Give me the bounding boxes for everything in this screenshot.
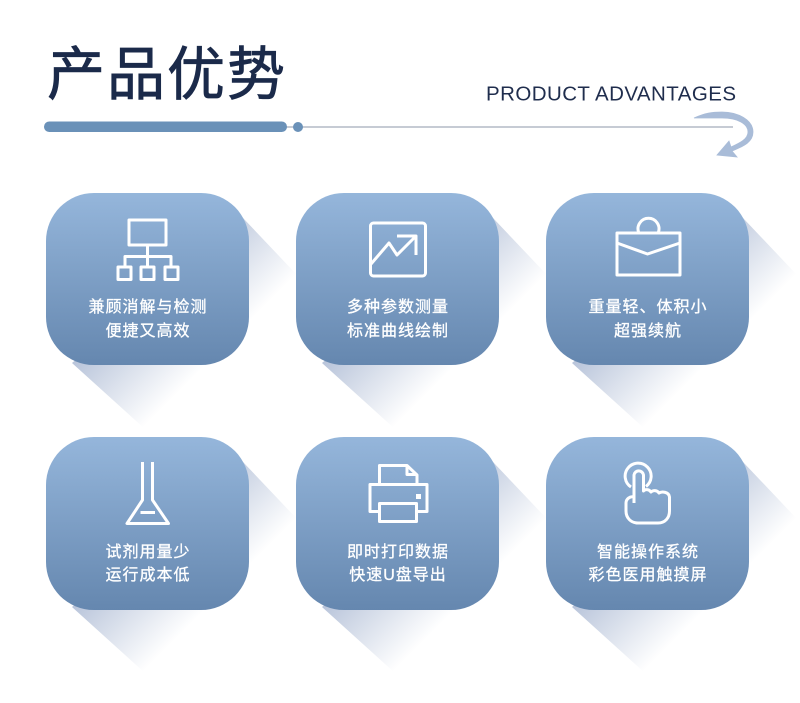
panel: card 5 — [296, 437, 566, 692]
text: card 4 caption: 试剂用量少 — [105, 543, 191, 561]
text: card 1 caption: 兼顾消解与检测 — [88, 298, 208, 316]
text: card 3 caption: 超强续航 — [614, 322, 682, 340]
icon: flask — [127, 462, 168, 524]
text: card 4 caption — [105, 543, 191, 584]
panel: card 4 — [46, 437, 316, 692]
text: card 6 caption — [588, 543, 708, 584]
title: 产品优势 — [47, 42, 287, 108]
text: card 5 caption: 快速U盘导出 — [349, 565, 447, 584]
text: card 5 caption: 即时打印数据 — [347, 543, 449, 561]
text: card 1 caption — [88, 298, 208, 340]
subtitle: product advantages: PRODUCT ADVANTAGES — [486, 82, 736, 106]
icon: printer — [370, 466, 427, 522]
icon: line chart — [370, 223, 426, 276]
icon: briefcase — [617, 218, 680, 275]
text: card 2 caption — [347, 298, 449, 340]
text: card 6 caption: 彩色医用触摸屏 — [588, 566, 708, 584]
icon: network hierarchy — [118, 220, 178, 280]
icon: touch hand — [625, 463, 670, 523]
arrow: curved return — [694, 112, 753, 157]
text: card 5 caption — [347, 543, 449, 584]
text: card 3 caption: 重量轻、体积小 — [588, 298, 708, 316]
panel: card 3 — [546, 193, 800, 448]
text: card 4 caption: 运行成本低 — [105, 566, 191, 584]
header divider bar — [44, 122, 733, 132]
text: card 2 caption: 标准曲线绘制 — [347, 322, 449, 340]
text: card 2 caption: 多种参数测量 — [347, 298, 449, 316]
text: card 6 caption: 智能操作系统 — [597, 543, 699, 561]
text: card 3 caption — [588, 298, 708, 340]
panel: card 2 — [296, 193, 566, 448]
panel: card 6 — [546, 437, 800, 692]
text: card 1 caption: 便捷又高效 — [105, 322, 191, 340]
panel: card 1 — [46, 193, 316, 448]
